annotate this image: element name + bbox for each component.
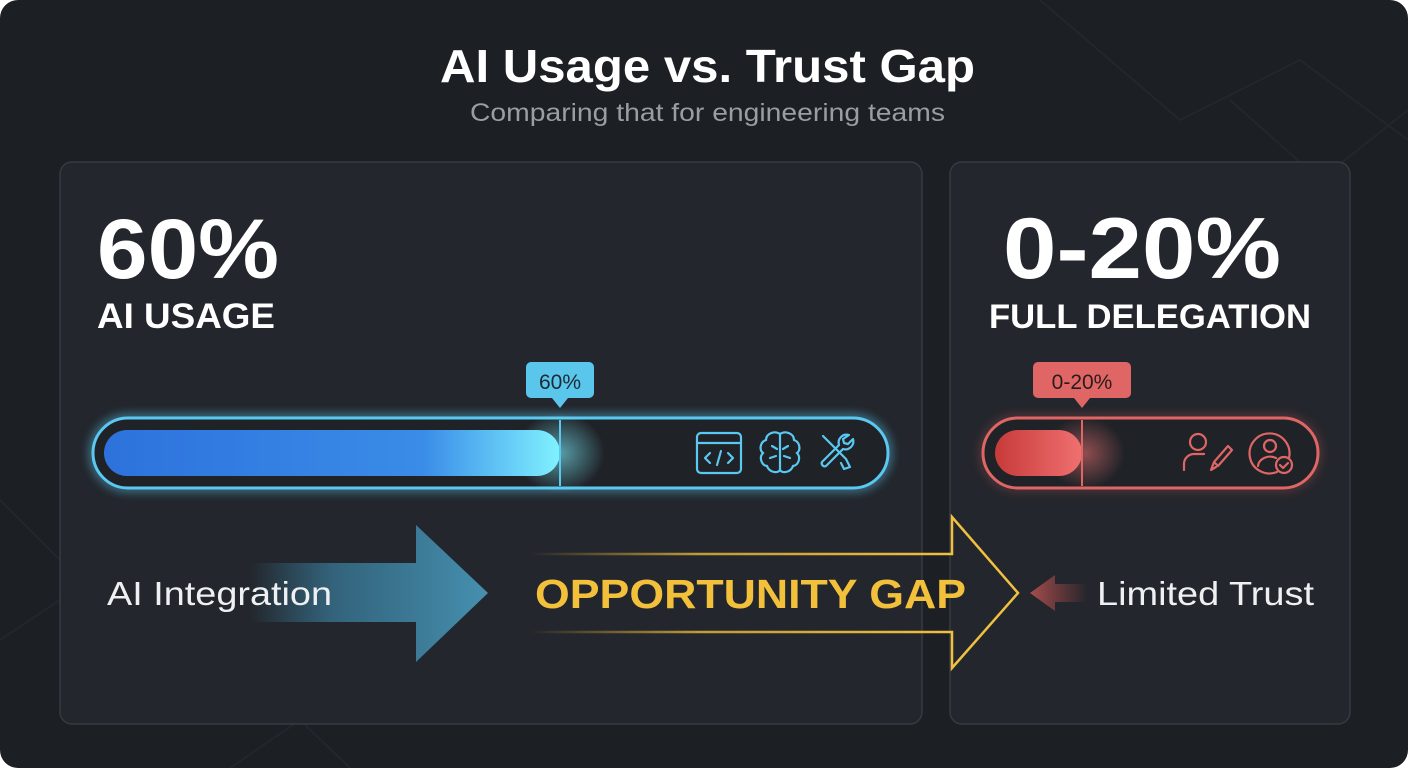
arrow: AI integration: [250, 525, 488, 662]
icon: code window: [697, 433, 741, 473]
icon: tools: [822, 435, 853, 469]
title: AI Usage vs. Trust Gap: [440, 40, 975, 92]
title: Comparing that for engineering teams: [470, 99, 945, 127]
icon: person check: [1250, 433, 1292, 473]
tooltip: 0-20%: 0-20%: [1052, 371, 1112, 394]
bar: AI usage progress: [93, 413, 888, 493]
panel: full delegation: [950, 162, 1350, 724]
stat: 0-20% full delegation: [989, 201, 1311, 336]
label: AI Integration: AI Integration: [107, 575, 332, 612]
panel: AI usage: [60, 162, 922, 724]
stat: 60% AI usage: AI USAGE: [97, 297, 275, 336]
bar: delegation progress: [983, 417, 1318, 489]
tooltip: 0-20%: [1033, 362, 1131, 408]
arrow: opportunity gap: [530, 517, 1018, 668]
title: [440, 40, 975, 127]
arrow: limited trust: [1030, 575, 1088, 611]
tooltip: 60%: [526, 362, 594, 408]
icon: person with pen: [1184, 434, 1232, 470]
label: Limited Trust: Limited Trust: [1097, 575, 1314, 612]
label: opportunity gap: OPPORTUNITY GAP: [535, 571, 966, 617]
stat: 0-20% full delegation: 0-20%: [1003, 201, 1281, 297]
stat: 60% AI usage: [97, 202, 279, 336]
icon: brain: [761, 432, 799, 472]
stat: 0-20% full delegation: FULL DELEGATION: [989, 298, 1311, 336]
tooltip: 60%: 60%: [539, 371, 581, 394]
stat: 60% AI usage: 60%: [97, 202, 279, 296]
